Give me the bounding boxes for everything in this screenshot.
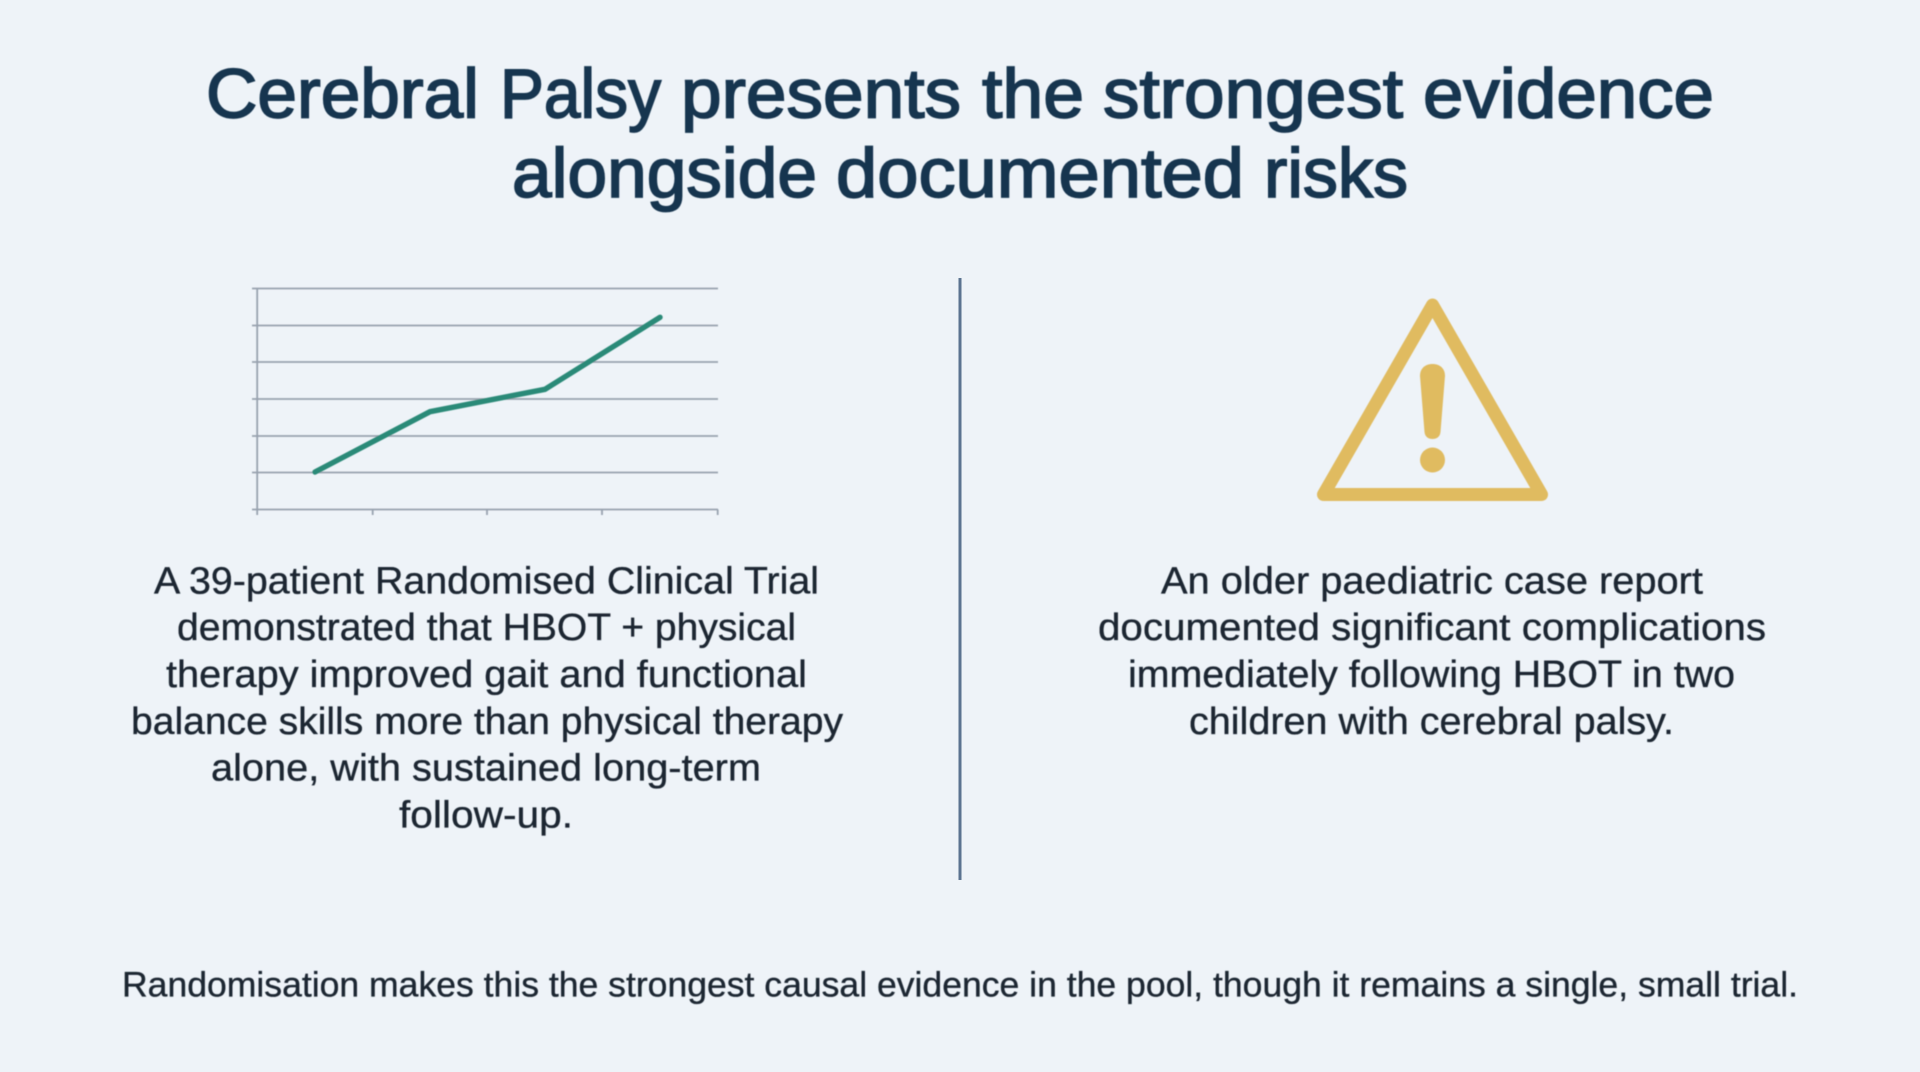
title: risks — [1264, 134, 1408, 212]
left body text — [131, 560, 843, 836]
left body text: demonstrated that HBOT + physical — [177, 607, 796, 649]
title: the — [982, 54, 1084, 132]
right body text: documented significant complications — [1098, 607, 1766, 649]
footer takeaway: Randomisation makes this the strongest causal evidence in the pool, though it remains a single, small trial. — [122, 966, 1798, 1004]
left body text: follow-up. — [399, 794, 573, 836]
line chart: improving outcome — [252, 288, 718, 515]
title: alongside — [512, 134, 817, 212]
title — [206, 54, 1714, 212]
left body text: therapy improved gait and functional — [166, 654, 807, 696]
left body text: A 39-patient Randomised Clinical Trial — [154, 560, 819, 602]
right body text: children with cerebral palsy. — [1189, 701, 1674, 743]
right body text: immediately following HBOT in two — [1128, 654, 1735, 696]
right body text: An older paediatric case report — [1161, 560, 1703, 602]
vertical divider — [958, 278, 962, 880]
title: documented — [836, 134, 1244, 212]
title: Cerebral — [206, 54, 479, 132]
left body text: balance skills more than physical therapy — [131, 701, 843, 743]
title: Palsy — [500, 54, 661, 132]
title: presents — [681, 54, 961, 132]
left body text: alone, with sustained long-term — [211, 748, 761, 790]
title: strongest — [1103, 54, 1403, 132]
right body text — [1098, 560, 1766, 743]
title: evidence — [1423, 54, 1714, 132]
icon: warning triangle — [1324, 305, 1542, 494]
trend line — [315, 317, 660, 472]
